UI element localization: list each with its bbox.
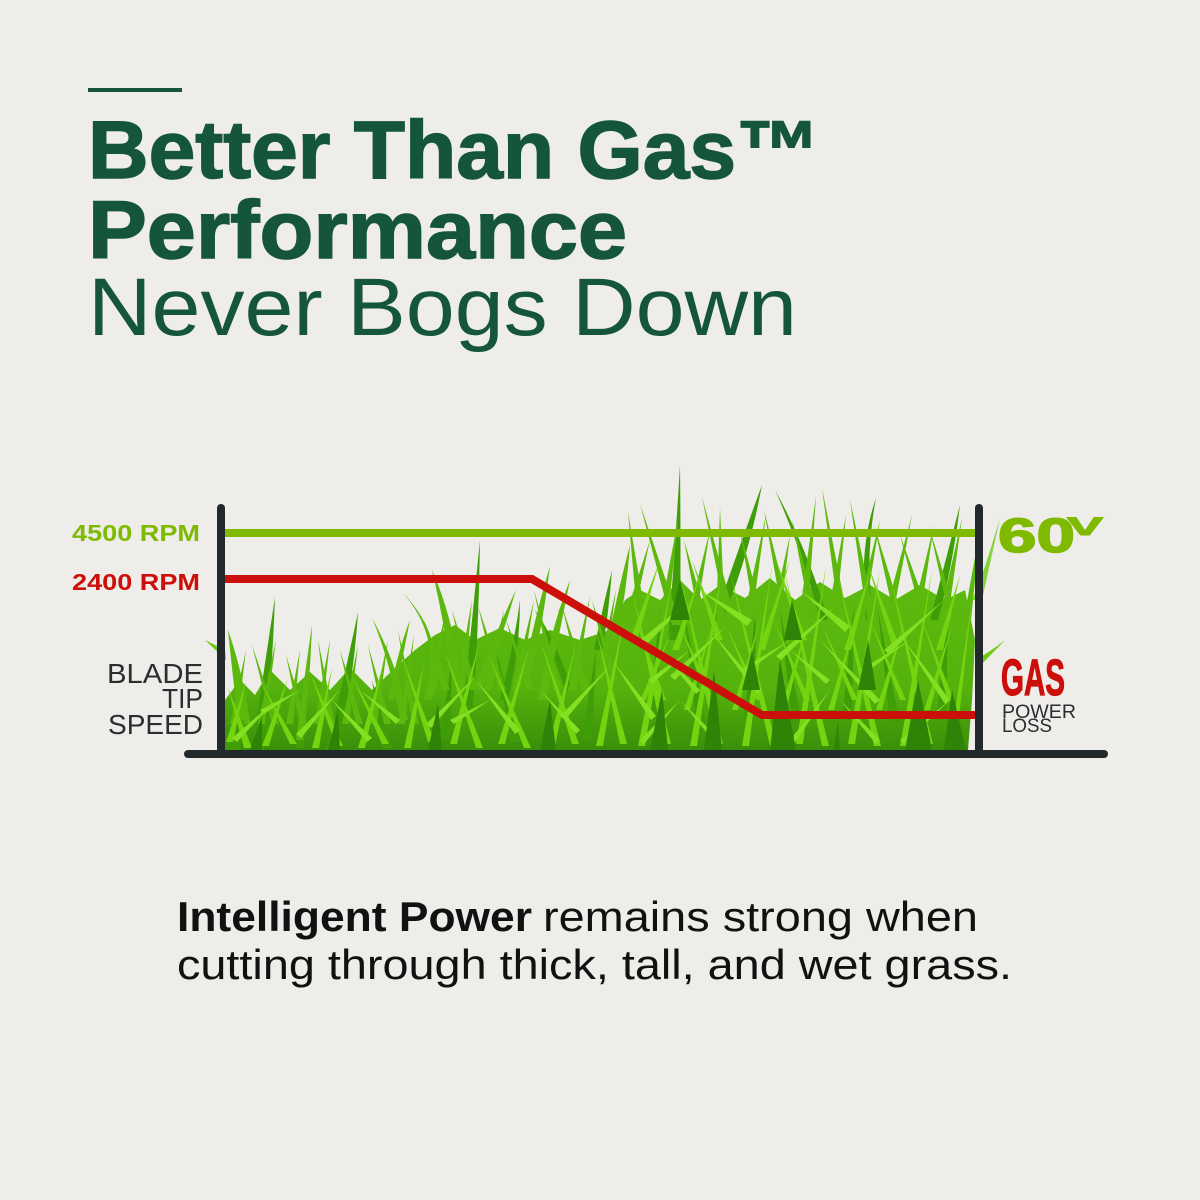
logo: 60V: V [1067,513,1104,541]
label: gas power loss: GAS [1001,649,1065,706]
label: 4500 RPM: 4500 RPM [72,520,200,546]
label: blade tip speed [107,658,203,740]
description text [177,893,1012,988]
title: Performance [88,185,627,276]
grass [205,465,1005,750]
logo: 60V [998,510,1104,563]
title: Never Bogs Down [88,262,797,353]
logo: 60V: 60 [998,510,1075,563]
label: blade tip speed: BLADE [107,658,203,689]
description text: remains strong when [543,893,978,940]
label: gas power loss: LOSS [1002,716,1052,737]
chart: blade tip speed [72,465,1104,754]
label: blade tip speed: SPEED [108,709,203,740]
label: gas power loss [1001,649,1076,737]
label: gas power loss: POWER [1002,702,1076,723]
label: 2400 RPM: 2400 RPM [72,569,200,595]
description text: cutting through thick, tall, and wet grass. [177,941,1012,988]
2400 RPM line [225,579,975,715]
title [88,88,820,353]
description text: Intelligent Power [177,893,532,940]
4500 RPM line [225,529,975,537]
label: blade tip speed: TIP [162,683,203,714]
axes [188,508,1104,754]
title: Better Than Gas™ [88,105,820,196]
